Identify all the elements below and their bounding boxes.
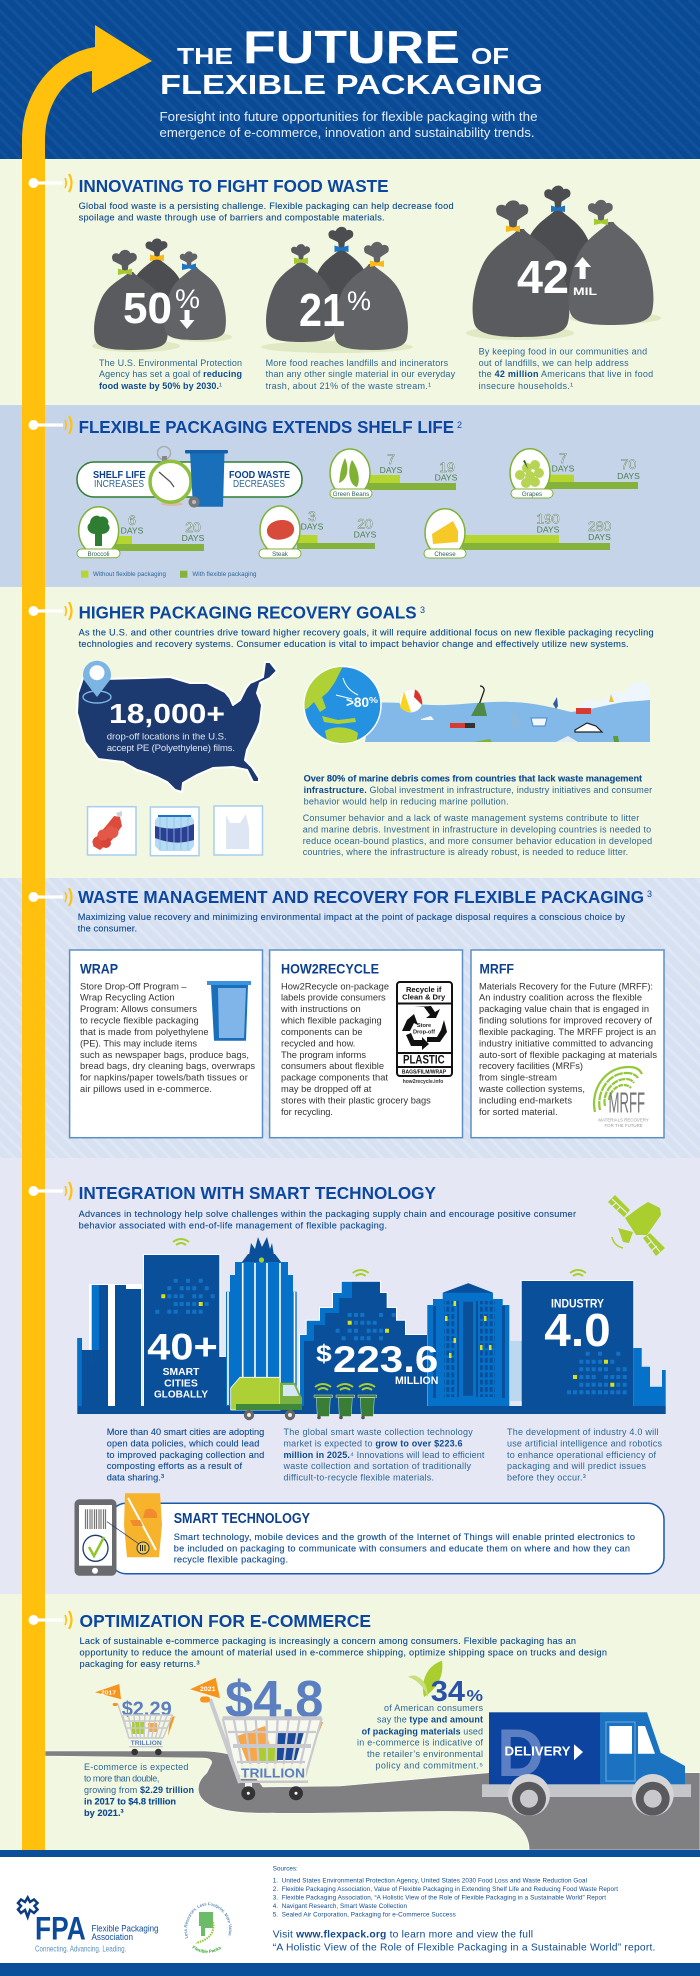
chart item: grapes: DAYS — [552, 464, 575, 474]
card: MRFF — [471, 950, 664, 1138]
product box: tomatoes — [88, 807, 136, 855]
globe: >80 — [346, 694, 369, 710]
sources: Flexible Packaging Association, “A Holistic View of the Role of Flexible Packaging in a Sustainable World” Report — [282, 1894, 606, 1901]
sources: Sealed Air Corporation, Packaging for e-Commerce Success — [282, 1912, 456, 1919]
card: WRAP: for napkins/paper towels/bath tissues or — [80, 1073, 248, 1083]
caption: waste collection market: The global smart waste collection technology — [284, 1427, 473, 1437]
chart item: green beans: 19 — [439, 459, 455, 475]
caption: waste collection market: waste collection and sortation of traditionally — [282, 1461, 472, 1471]
sources: 1. — [273, 1877, 278, 1884]
icon: beach ball — [400, 689, 422, 712]
sources: 4. — [273, 1903, 278, 1910]
legend: Without flexible packaging — [93, 571, 167, 578]
big cart 2021: 2021 — [200, 1686, 216, 1693]
logo: less resources — [184, 1902, 232, 1954]
caption: smart cities: composting efforts as a result of — [107, 1461, 242, 1471]
big cart 2021: $4.8 — [225, 1671, 323, 1729]
chart item: grapes: 7 — [559, 450, 567, 466]
chart item: steak: Steak — [272, 551, 289, 558]
caption: waste collection market — [282, 1427, 485, 1483]
caption: 50%: Agency has set a goal of reducing — [99, 369, 242, 379]
call to action: “A Holistic View of the Role of Flexible Packaging in a Sustainable World” report. — [273, 1942, 655, 1953]
austin tower — [226, 1237, 297, 1406]
stat: 34%: % — [466, 1688, 483, 1705]
heading marker — [28, 416, 72, 434]
heading: INTEGRATION WITH SMART TECHNOLOGY — [79, 1183, 436, 1203]
trash bags: 50% — [92, 238, 232, 352]
chart item: cheese: 190 — [536, 510, 560, 526]
small cart 2017: TRILLION — [131, 1740, 162, 1747]
caption: e-commerce growth: to more than double, — [84, 1773, 159, 1783]
chart item: grapes: DAYS — [617, 471, 640, 481]
chart item: steak — [259, 506, 377, 558]
heading marker — [28, 1611, 72, 1629]
sources: Flexible Packaging Association, Value of Flexible Packaging in Extending Shelf Life and Reducing Food Waste Report — [282, 1886, 618, 1893]
stat: 18,000+: 18,000+ — [109, 698, 225, 729]
card: MRFF: industry initiative committed to advancing — [479, 1038, 653, 1048]
sources: Sources: — [273, 1866, 298, 1872]
stat: industry 4.0: INDUSTRY — [551, 1298, 604, 1310]
card: WRAP: that is made from polyethylene — [80, 1027, 208, 1037]
stat: 34% — [357, 1676, 484, 1771]
title: THE — [177, 43, 233, 69]
card: MRFF: including end-markets — [479, 1096, 572, 1106]
chart item: steak: 3 — [308, 508, 316, 524]
chart item: grapes — [510, 449, 640, 498]
footnote: 3 — [647, 889, 652, 899]
icon: delivery truck — [482, 1712, 691, 1816]
intro text: technologies and recovery systems. Consumer education is vital to impact behavior change and effectively utilize new systems. — [79, 639, 629, 649]
intro text: Advances in technology help solve challenges within the packaging supply chain and encourage positive consumer — [79, 1209, 576, 1219]
stat: 18,000+ — [107, 698, 235, 754]
heading marker — [28, 1182, 72, 1200]
chart item: broccoli: Broccoli — [87, 551, 110, 558]
paragraph: consumer behavior — [303, 813, 652, 857]
icon: delivery truck: DELIVERY — [504, 1744, 571, 1758]
small cart 2017 — [95, 1684, 175, 1755]
trash bags: 42 million: MIL — [573, 286, 597, 298]
heading: WASTE MANAGEMENT AND RECOVERY FOR FLEXIBLE PACKAGING — [78, 887, 644, 907]
stat: 34%: the retailer’s environmental — [367, 1749, 483, 1759]
caption: industry 4.0: The development of industry 4.0 will — [507, 1427, 658, 1437]
MRFF logo: MATERIALS RECOVERY — [598, 1118, 649, 1123]
intro text: packaging for easy returns.³ — [80, 1659, 200, 1669]
logo: FPA: Flexible Packaging — [92, 1924, 158, 1934]
wifi icons — [173, 1239, 586, 1276]
how2recycle label: Recycle if — [406, 985, 442, 994]
trash bags: 42 million: 42 — [517, 251, 569, 303]
logo: FPA: FPA — [35, 1910, 86, 1946]
card: How2Recycle: which flexible packaging — [280, 1016, 382, 1026]
trash bags: 21%: % — [347, 286, 371, 316]
intro text: Lack of sustainable e-commerce packaging is increasingly a concern among consumers. Flexible packaging has an — [80, 1636, 576, 1646]
paragraph: consumer behavior: reduce ocean-bound plastics, and more consumer behavior education in developed — [303, 836, 652, 846]
sources: Navigant Research, Smart Waste Collection — [282, 1903, 407, 1910]
heading: OPTIMIZATION FOR E-COMMERCE — [80, 1611, 371, 1631]
section: e-commerce — [28, 1611, 691, 1818]
sources: United States Environmental Protection Agency, United States 2030 Food Loss and Waste Reduction Goal — [282, 1877, 587, 1884]
caption: 42 million — [479, 346, 653, 391]
caption: waste collection market: million in 2025.⁴ Innovations will lead to efficient — [284, 1450, 485, 1460]
caption: 42 million: insecure households.¹ — [479, 381, 573, 391]
product box: plastic bag — [214, 806, 262, 855]
header band — [0, 0, 700, 159]
icons: smart bins — [314, 1384, 377, 1419]
icon: phone — [74, 1499, 139, 1576]
caption: 21%: trash, about 21% of the waste stream.¹ — [266, 381, 431, 391]
paragraph: consumer behavior: countries, where the infrastructure is already robust, is needed to reduce litter. — [303, 847, 628, 857]
intro text — [80, 1636, 607, 1669]
stat: 34%: of American consumers — [384, 1703, 484, 1713]
panel: smart technology background — [0, 1158, 700, 1594]
card: WRAP: Wrap Recycling Action — [80, 993, 175, 1003]
stat: 40+ smart cities: GLOBALLY — [154, 1388, 208, 1400]
card: WRAP: to recycle flexible packaging — [80, 1016, 199, 1026]
intro text: spoilage and waste through use of barriers and compostable materials. — [79, 212, 385, 222]
chart item: cheese: Cheese — [434, 551, 456, 558]
sources: 5. — [273, 1912, 278, 1919]
how2recycle label: Store — [417, 1023, 431, 1029]
how2recycle label: Clean & Dry — [402, 992, 446, 1002]
chart item: grapes: 70 — [621, 456, 636, 472]
card: WRAP: bread bags, dry cleaning bags, overwraps — [80, 1061, 255, 1071]
chart item: cheese: DAYS — [537, 524, 560, 534]
product box: water bottles — [150, 807, 199, 856]
stat: $223.6 million — [316, 1339, 438, 1387]
card: How2Recycle: package components that — [281, 1073, 388, 1083]
card: MRFF: packaging value chain that is engaged in — [479, 1004, 649, 1014]
card: MRFF: waste collection systems, — [478, 1084, 585, 1094]
floating debris — [421, 686, 619, 742]
caption: waste collection market: difficult-to-recycle flexible materials. — [284, 1473, 434, 1483]
chart item: green beans: 7 — [387, 451, 395, 467]
card: MRFF: from single-stream — [479, 1073, 557, 1083]
stat: 40+ smart cities — [147, 1326, 218, 1400]
card: How2Recycle: recycled and how. — [281, 1038, 355, 1048]
stat: 40+ smart cities: SMART — [163, 1366, 200, 1378]
caption: smart cities: open data policies, which could lead — [107, 1438, 259, 1448]
paragraph: consumer behavior: Consumer behavior and a lack of waste management systems contribute to litter — [303, 813, 639, 823]
section: shelf life — [28, 416, 640, 578]
icon: garbage truck — [231, 1377, 302, 1420]
paragraph: marine debris: Over 80% of marine debris comes from countries that lack waste management — [304, 774, 642, 784]
how2recycle label: BAGS/FILM/WRAP — [402, 1070, 447, 1076]
stat: 40+ smart cities: CITIES — [164, 1377, 198, 1389]
icon: stopwatch — [150, 446, 191, 506]
caption: industry 4.0: before they occur.³ — [507, 1473, 586, 1483]
card: MRFF: auto-sort of flexible packaging at materials — [479, 1050, 657, 1060]
yellow timeline arrow — [22, 25, 152, 1850]
shelf life pill: DECREASES — [233, 478, 285, 490]
card: How2Recycle: may be dropped off at — [281, 1084, 372, 1094]
stat: 18,000+: drop-off locations in the U.S. — [107, 732, 227, 742]
intro text — [79, 1209, 576, 1230]
chart item: green beans: DAYS — [380, 465, 403, 475]
shelf life pill — [77, 462, 302, 497]
callout: smart technology: Smart technology, mobile devices and the growth of the Internet of Things will enable printed electronics to — [174, 1532, 635, 1542]
globe — [300, 664, 381, 745]
icon: location pin — [83, 661, 111, 703]
intro text: the consumer. — [78, 923, 137, 933]
how2recycle label — [397, 982, 452, 1085]
intro text: Maximizing value recovery and minimizing environmental impact at the point of package disposal requires a conscious choice by — [78, 912, 625, 922]
icon: pouch — [124, 1493, 162, 1557]
stat: $223.6 million: MILLION — [395, 1375, 438, 1387]
caption: 50%: The U.S. Environmental Protection — [99, 358, 242, 368]
globe: % — [369, 696, 378, 705]
chart item: grapes: Grapes — [522, 491, 542, 498]
paragraph: marine debris — [304, 774, 652, 806]
card: How2Recycle: stores with their plastic grocery bags — [281, 1096, 431, 1106]
section: waste management — [28, 887, 664, 1138]
card: WRAP: Store Drop-Off Program – — [80, 981, 187, 991]
caption: e-commerce growth — [84, 1762, 194, 1818]
card: WRAP: WRAP — [80, 960, 118, 976]
callout: smart technology: recycle flexible packaging. — [174, 1555, 288, 1565]
city skyline — [77, 1237, 666, 1420]
card: MRFF: An industry coalition across the flexible — [479, 993, 642, 1003]
subtitle: emergence of e-commerce, innovation and sustainability trends. — [160, 126, 534, 140]
card: How2Recycle: The program informs — [281, 1050, 366, 1060]
callout: smart technology: SMART TECHNOLOGY — [174, 1511, 310, 1527]
caption: industry 4.0: packaging and will predict issues — [507, 1461, 646, 1471]
caption: smart cities: to improved packaging collection and — [107, 1450, 264, 1460]
card: MRFF: recovery facilities (MRFs) — [479, 1061, 583, 1071]
stat: 34%: of packaging materials used — [362, 1726, 483, 1736]
card: How2Recycle: components can be — [281, 1027, 362, 1037]
footnote: 2 — [457, 420, 462, 430]
panel: waste management background — [0, 878, 700, 1158]
card: How2Recycle: labels provide consumers — [281, 993, 386, 1003]
subtitle — [160, 110, 538, 140]
legend: With flexible packaging — [192, 571, 257, 578]
card: How2Recycle — [270, 950, 462, 1138]
heading marker — [28, 174, 72, 192]
caption: e-commerce growth: by 2021.³ — [84, 1808, 124, 1818]
stat: 34%: in e-commerce is indicative of — [357, 1738, 483, 1748]
card: WRAP: air pillows used in e-commerce. — [80, 1084, 212, 1094]
paragraph: consumer behavior: and marine debris. Investment in infrastructure in developing countries is needed to — [303, 824, 651, 834]
chart item: green beans: Green Beans — [333, 491, 369, 498]
intro text — [79, 201, 454, 222]
sources: 3. — [273, 1894, 278, 1901]
stat: 34%: say the type and amount — [377, 1715, 483, 1725]
chart item: green beans — [330, 449, 458, 498]
caption: 42 million: out of landfills, we can help address — [479, 358, 629, 368]
small cart 2017: 2017 — [101, 1690, 116, 1696]
cart contents — [237, 1726, 304, 1763]
caption: 50%: food waste by 50% by 2030.¹ — [99, 381, 222, 391]
trash bags: 50%: % — [175, 284, 200, 314]
stat: $223.6 million: 223.6 — [333, 1339, 438, 1380]
section: innovating to fight food waste — [28, 174, 661, 391]
trash bags: 21% — [261, 227, 413, 353]
intro text — [79, 628, 654, 649]
call to action: Visit www.flexpack.org to learn more and view the full — [273, 1930, 533, 1941]
caption: waste collection market: market is expected to grow to over $223.6 — [284, 1438, 462, 1448]
MRFF logo — [594, 1067, 649, 1128]
card: MRFF: for sorted material. — [479, 1107, 558, 1117]
chart item: cheese — [424, 509, 611, 558]
heading: FLEXIBLE PACKAGING EXTENDS SHELF LIFE — [79, 417, 454, 437]
trash bags: 21%: 21 — [299, 284, 345, 336]
card: How2Recycle: HOW2RECYCLE — [281, 960, 379, 976]
logo: less resources: Less Resources. Less Footprint. More Value. — [184, 1902, 232, 1938]
card: How2Recycle: for recycling. — [281, 1107, 333, 1117]
card: WRAP: (PE). This may include items — [80, 1038, 197, 1048]
card: How2Recycle: How2Recycle on-package — [281, 981, 389, 991]
title: FUTURE — [243, 21, 460, 73]
chart item: broccoli: DAYS — [182, 533, 205, 543]
intro text: opportunity to reduce the amount of material used in e-commerce shipping, optimize shipping space on trucks and design — [80, 1648, 607, 1658]
logo: FPA: Connecting. Advancing. Leading. — [35, 1945, 126, 1954]
caption: industry 4.0: to enhance operational efficiency of — [507, 1450, 656, 1460]
caption: 21% — [266, 358, 456, 391]
heading marker — [28, 602, 72, 620]
how2recycle label: PLASTIC — [403, 1054, 445, 1066]
shelf life pill: FOOD WASTE — [229, 469, 290, 481]
big cart 2021 — [190, 1671, 323, 1800]
how2recycle label: how2recycle.info — [403, 1079, 443, 1085]
shelf life pill: INCREASES — [94, 478, 144, 490]
chart item: broccoli: 20 — [185, 519, 201, 535]
intro text: behavior associated with end-of-life management of flexible packaging. — [79, 1220, 387, 1230]
small cart 2017: $2.29 — [122, 1698, 172, 1720]
panel: food waste background — [0, 159, 700, 405]
logo: FPA: Association — [92, 1932, 133, 1943]
card: MRFF: finding solutions for improved recovery of — [479, 1016, 652, 1026]
shelf life pill: SHELF LIFE — [93, 469, 146, 481]
caption: smart cities: More than 40 smart cities are adopting — [107, 1427, 264, 1437]
card: WRAP — [70, 950, 262, 1138]
stat: 34%: 34 — [431, 1676, 465, 1708]
ocean debris illustration — [300, 664, 650, 745]
MRFF logo: FOR THE FUTURE — [604, 1123, 643, 1128]
big cart 2021: TRILLION — [241, 1766, 305, 1780]
card: WRAP: Program: Allows consumers — [80, 1004, 197, 1014]
icon: blue bin — [207, 981, 251, 1041]
US map — [77, 662, 277, 792]
panel: recovery goals background — [0, 587, 700, 878]
chart item: steak: DAYS — [354, 530, 377, 540]
heading: INNOVATING TO FIGHT FOOD WASTE — [79, 176, 389, 196]
caption: 21%: More food reaches landfills and incinerators — [266, 358, 449, 368]
footnote: 3 — [420, 605, 425, 615]
caption: smart cities — [107, 1427, 264, 1483]
icon: satellite — [608, 1195, 665, 1256]
sources — [273, 1866, 618, 1919]
chart item: green beans: DAYS — [435, 472, 458, 482]
chart item: cheese: DAYS — [588, 532, 611, 542]
card: MRFF: Materials Recovery for the Future (MRFF): — [479, 981, 653, 991]
paragraph: marine debris: infrastructure. Global investment in infrastructure, industry initiatives and consumer — [304, 785, 652, 795]
legend — [81, 571, 257, 578]
caption: 21%: than any other single material in our everyday — [266, 369, 456, 379]
caption: e-commerce growth: E-commerce is expected — [84, 1762, 188, 1772]
call to action — [273, 1930, 655, 1953]
MRFF logo: MRFF — [608, 1088, 645, 1120]
intro text: Global food waste is a persisting challenge. Flexible packaging can help decrease food — [79, 201, 454, 211]
icon: delivery truck: D — [497, 1715, 544, 1791]
logo: less resources: Flexible Packaging — [192, 1946, 222, 1954]
icon: leaf — [408, 1661, 442, 1697]
section: smart technology — [28, 1182, 666, 1576]
caption: industry 4.0: use artificial intelligence and robotics — [507, 1438, 662, 1448]
stat: 40+ smart cities: 40+ — [147, 1326, 218, 1368]
windows — [155, 1279, 627, 1394]
caption: 42 million: the 42 million Americans that live in food — [479, 369, 653, 379]
panel: shelf life background — [0, 405, 700, 587]
panel: e-commerce background — [0, 1594, 700, 1850]
caption: smart cities: data sharing.³ — [107, 1473, 164, 1483]
title — [160, 21, 543, 100]
card: How2Recycle: with instructions on — [280, 1004, 361, 1014]
title: FLEXIBLE PACKAGING — [160, 69, 543, 100]
caption: e-commerce growth: in 2017 to $4.8 trillion — [84, 1796, 176, 1806]
intro text — [78, 912, 625, 933]
chart item: broccoli: DAYS — [121, 526, 144, 536]
chart item: cheese: 280 — [588, 518, 611, 534]
icon: blue bin — [185, 450, 228, 508]
callout: smart technology: be included on packaging to communicate with consumers and educate them on where and how they can — [174, 1543, 630, 1553]
sources: 2. — [273, 1886, 278, 1893]
card: How2Recycle: consumers about flexible — [281, 1061, 384, 1071]
logo: FPA — [18, 1898, 158, 1954]
trash bags: 42 million — [466, 186, 661, 340]
chart item: steak: DAYS — [301, 522, 324, 532]
heading marker — [28, 888, 72, 906]
card: MRFF: MRFF — [480, 960, 514, 976]
stat: $223.6 million: $ — [316, 1341, 332, 1368]
caption: e-commerce growth: growing from $2.29 trillion — [84, 1785, 194, 1795]
paragraph: marine debris: behavior would help in reducing marine pollution. — [304, 796, 509, 806]
heading: HIGHER PACKAGING RECOVERY GOALS — [79, 602, 417, 622]
card: MRFF: flexible packaging. The MRFF project is an — [479, 1027, 656, 1037]
caption: industry 4.0 — [507, 1427, 662, 1483]
intro text: As the U.S. and other countries drive toward higher recovery goals, it will require additional focus on new flexible packaging recycling — [79, 628, 654, 638]
road — [45, 1751, 700, 1850]
caption: 50% — [99, 358, 242, 391]
chart item: broccoli — [77, 507, 205, 558]
caption: 42 million: By keeping food in our communities and — [479, 346, 647, 356]
trash bags: 50%: 50 — [123, 284, 172, 333]
subtitle: Foresight into future opportunities for flexible packaging with the — [160, 110, 538, 124]
callout: smart technology — [74, 1493, 664, 1576]
title: OF — [471, 43, 509, 69]
section: recovery goals — [28, 602, 654, 857]
chart item: steak: 20 — [357, 516, 373, 532]
stat: industry 4.0: 4.0 — [544, 1304, 611, 1356]
stat: 34%: policy and commitment.⁵ — [375, 1761, 483, 1771]
card: WRAP: such as newspaper bags, produce bags, — [80, 1050, 249, 1060]
chart item: broccoli: 6 — [128, 512, 136, 528]
stat: 18,000+: accept PE (Polyethylene) films. — [107, 743, 235, 754]
how2recycle label: Drop-off — [413, 1030, 435, 1036]
